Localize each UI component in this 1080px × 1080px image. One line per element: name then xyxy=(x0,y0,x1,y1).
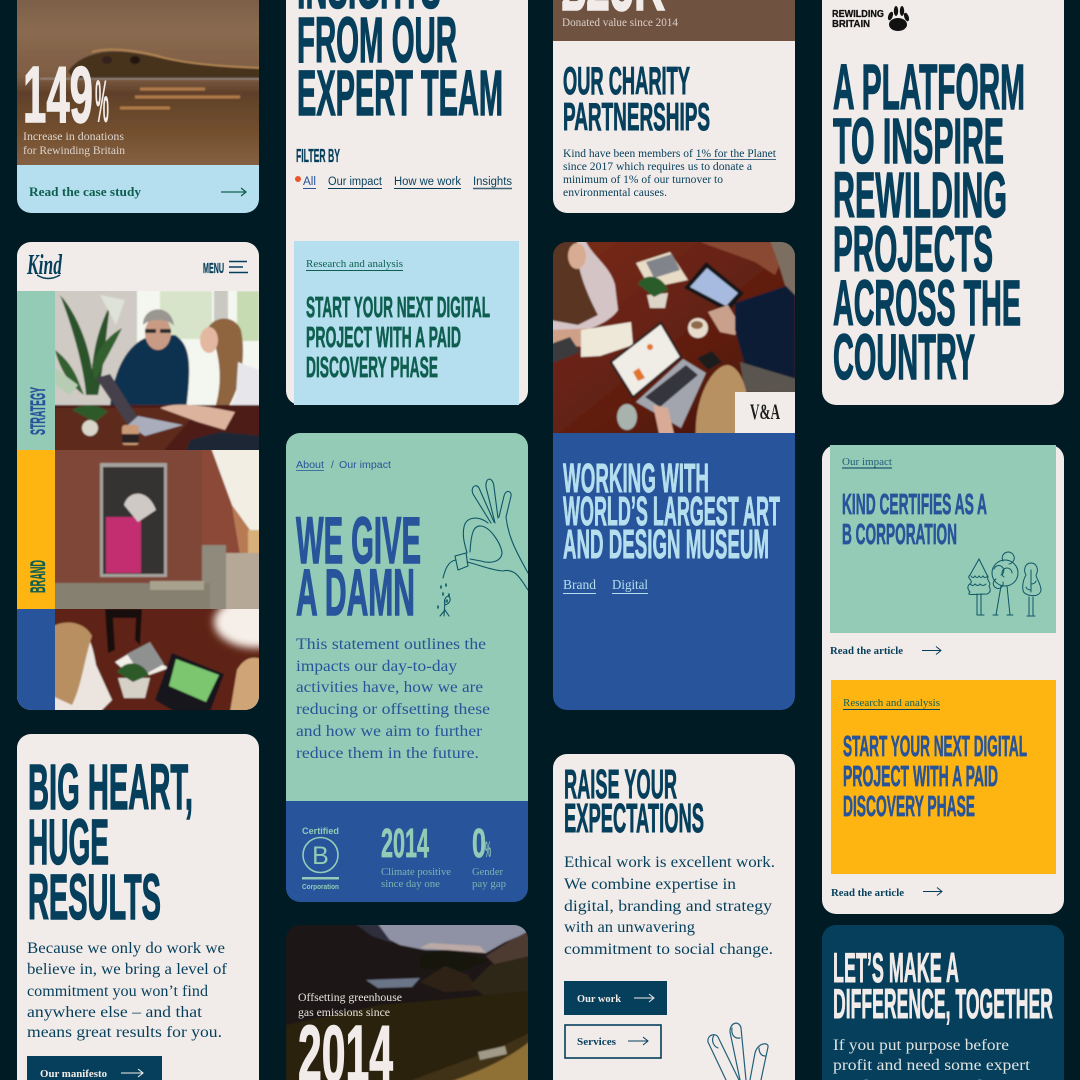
article card: discovery phase, blue: DISCOVERY PHASE xyxy=(306,352,438,384)
filter links: Insights xyxy=(473,176,512,188)
panel: big heart card: BIG HEART, xyxy=(28,751,193,823)
body text: Kind have been members of 1% for the Planet xyxy=(563,148,777,160)
strip: strategy xyxy=(17,291,55,450)
stat: 2014 climate positive xyxy=(381,828,451,890)
stat caption: for Rewinding Britain xyxy=(23,143,125,157)
body text: activities have, how we are xyxy=(296,679,483,696)
breadcrumb: About xyxy=(296,460,324,471)
button: services xyxy=(565,1025,661,1058)
body text: digital, branding and strategy xyxy=(564,898,772,915)
panel: charity partnerships card xyxy=(553,0,795,213)
link: read the article xyxy=(831,888,942,899)
stat caption: Increase in donations xyxy=(23,129,124,143)
heading: insights from our expert team xyxy=(297,0,503,129)
body text: with an unwavering xyxy=(564,919,695,936)
strip: strategy: STRATEGY xyxy=(27,387,50,435)
heading: raise your expectations: RAISE YOUR xyxy=(564,761,677,807)
link: read the article xyxy=(830,646,941,657)
filter links: How we work xyxy=(394,176,461,188)
badge: certified B corporation: Certified xyxy=(302,826,339,837)
body text: means great results for you. xyxy=(27,1024,222,1041)
caption xyxy=(298,993,402,1018)
link: read the article: Read the article xyxy=(830,646,903,657)
heading: our charity partnerships xyxy=(564,66,710,131)
badge: certified B corporation xyxy=(302,826,339,891)
breadcrumb: / xyxy=(331,460,334,471)
caption: gas emissions since xyxy=(298,1005,390,1019)
logo: Rewilding Britain xyxy=(832,6,910,31)
text: WORLD’S LARGEST ART xyxy=(563,488,780,534)
article card: discovery phase, blue: PROJECT WITH A PAID xyxy=(306,322,461,354)
body text: Because we only do work we xyxy=(27,940,225,957)
button: our work xyxy=(564,981,667,1015)
panel: V&A case study card xyxy=(548,237,800,710)
heading: raise your expectations xyxy=(564,761,704,841)
panel: we give a damn card xyxy=(286,433,528,902)
tags: Brand xyxy=(563,577,596,592)
panel: insights card: FILTER BY xyxy=(296,146,340,166)
strip: brand: BRAND xyxy=(27,560,50,593)
heading: big heart huge results xyxy=(28,751,193,933)
body text: commitment you won’t find xyxy=(27,983,208,1000)
stat: 2014 climate positive: Climate positive xyxy=(381,866,451,878)
panel: raise your expectations card xyxy=(553,754,795,1080)
logo: Kind: Kind xyxy=(26,250,63,281)
body text: since 2017 which requires us to donate a xyxy=(563,161,752,173)
heading: big heart huge results: HUGE xyxy=(28,806,109,878)
logo: V&A: V&A xyxy=(750,399,780,424)
beaver photo xyxy=(17,0,259,165)
body text xyxy=(564,854,775,958)
article: B corporation: B CORPORATION xyxy=(842,519,957,551)
panel: we give a damn card: A DAMN xyxy=(296,555,415,629)
photo: meeting xyxy=(55,291,259,450)
body text: environmental causes. xyxy=(563,187,667,199)
stat: 2014 climate positive: since day one xyxy=(381,878,440,890)
article: B corporation: Our impact xyxy=(842,456,892,468)
body text: believe in, we bring a level of xyxy=(27,961,228,978)
photo: poster on brick wall xyxy=(55,450,259,609)
logo: V&A xyxy=(735,392,795,433)
body text xyxy=(27,940,228,1041)
article: discovery phase, yellow: Research and analysis xyxy=(843,697,940,709)
article card: discovery phase, blue: Research and analysis xyxy=(306,258,403,270)
panel: insights card xyxy=(286,0,528,405)
body text: If you put purpose before xyxy=(833,1037,1009,1054)
panel: we give a damn card: WE GIVE xyxy=(296,503,421,577)
body text: We combine expertise in xyxy=(564,876,736,893)
stat: 149% xyxy=(25,66,109,124)
panel: rewilding platform card xyxy=(822,0,1064,405)
stats band xyxy=(286,801,528,902)
body text xyxy=(563,148,777,199)
stat caption: Donated value since 2014 xyxy=(562,17,678,29)
blue content panel: AND DESIGN MUSEUM xyxy=(563,521,769,567)
panel: charity partnerships card: PARTNERSHIPS xyxy=(563,96,710,139)
blue content panel xyxy=(553,433,795,710)
photo header xyxy=(553,0,795,41)
heading: a platform to inspire xyxy=(833,51,1025,393)
strip: blue xyxy=(17,609,55,710)
tags xyxy=(563,580,648,594)
body text: minimum of 1% of our turnover to xyxy=(563,174,723,186)
heading: working with world's largest art and design museum: WORKING WITH xyxy=(563,455,709,501)
button: our manifesto: Our manifesto xyxy=(40,1068,107,1080)
body text: Ethical work is excellent work. xyxy=(564,854,775,871)
panel: Kind services menu card xyxy=(17,242,259,710)
body text: and how we aim to further xyxy=(296,723,483,740)
body text xyxy=(296,636,490,762)
stat: 0% gender pay gap: pay gap xyxy=(472,878,506,890)
heading: our charity partnerships: OUR CHARITY xyxy=(563,60,690,103)
body text: profit and need some expert xyxy=(833,1057,1031,1074)
stat: 0% gender pay gap: % xyxy=(485,837,491,862)
article card: discovery phase, blue xyxy=(294,241,519,405)
photo: mountain valley xyxy=(280,920,534,1080)
stat: 0% gender pay gap: 0 xyxy=(472,820,486,866)
panel: let's make a difference card xyxy=(822,925,1064,1080)
photo: team around table from above xyxy=(548,237,800,440)
body text: impacts our day-to-day xyxy=(296,658,457,675)
stat: 0% gender pay gap xyxy=(472,828,506,890)
article: B corporation xyxy=(830,445,1056,633)
heading: we give a damn xyxy=(296,516,420,616)
panel: beaver case study card: % xyxy=(95,68,109,135)
body text: reduce them in the future. xyxy=(296,745,479,762)
logo: Rewilding Britain: BRITAIN xyxy=(832,18,870,30)
illustration: hand fingers xyxy=(708,1023,768,1080)
filter links: All xyxy=(303,176,316,188)
body text: anywhere else – and that xyxy=(27,1004,203,1021)
strip: brand xyxy=(17,450,55,609)
case study link bar xyxy=(17,165,259,213)
logo: Kind xyxy=(26,254,62,280)
badge: certified B corporation: B xyxy=(312,842,329,870)
stat: 149%: 149 xyxy=(23,50,93,139)
button: our work: Our work xyxy=(577,993,622,1005)
breadcrumb xyxy=(296,460,391,471)
button: services: Services xyxy=(577,1036,617,1048)
panel: raise your expectations card: EXPECTATIONS xyxy=(564,795,704,841)
case study link bar: Read the case study xyxy=(29,184,142,199)
panel: insights card: EXPERT TEAM xyxy=(297,57,503,129)
heading: big heart huge results: RESULTS xyxy=(28,861,161,933)
article card: discovery phase, blue: START YOUR NEXT DIGITAL xyxy=(306,292,490,324)
stat caption xyxy=(23,132,125,156)
panel: offsetting emissions card xyxy=(280,920,534,1080)
article: discovery phase, yellow xyxy=(831,680,1056,874)
panel: big heart card xyxy=(17,734,259,1080)
link: read the article: Read the article xyxy=(831,888,904,899)
heading: insights from our expert team: FROM OUR xyxy=(297,4,457,76)
photo: team around table xyxy=(55,609,259,710)
illustration: hand with watering can xyxy=(438,479,528,616)
badge: certified B corporation: Corporation xyxy=(302,882,339,891)
heading: working with world's largest art and design museum xyxy=(562,463,780,559)
button: our manifesto xyxy=(27,1056,162,1080)
heading: let's make a difference, together xyxy=(833,944,1053,1027)
menu button: MENU xyxy=(203,260,224,277)
body text: commitment to social change. xyxy=(564,941,773,958)
caption: Offsetting greenhouse xyxy=(298,990,402,1004)
stat: 2014 climate positive: 2014 xyxy=(381,820,429,866)
body text: This statement outlines the xyxy=(296,636,486,653)
body text xyxy=(833,1037,1031,1080)
filter links: Our impact xyxy=(328,176,383,188)
panel: articles card xyxy=(822,445,1064,914)
body text: reducing or offsetting these xyxy=(296,701,490,718)
logo: Rewilding Britain: REWILDING xyxy=(832,8,884,20)
illustration: trees xyxy=(968,552,1041,616)
panel: beaver case study card xyxy=(10,0,266,213)
filter links xyxy=(295,176,512,188)
stat: 0% gender pay gap: Gender xyxy=(472,866,503,878)
breadcrumb: Our impact xyxy=(339,460,391,471)
tags: Digital xyxy=(612,577,648,592)
